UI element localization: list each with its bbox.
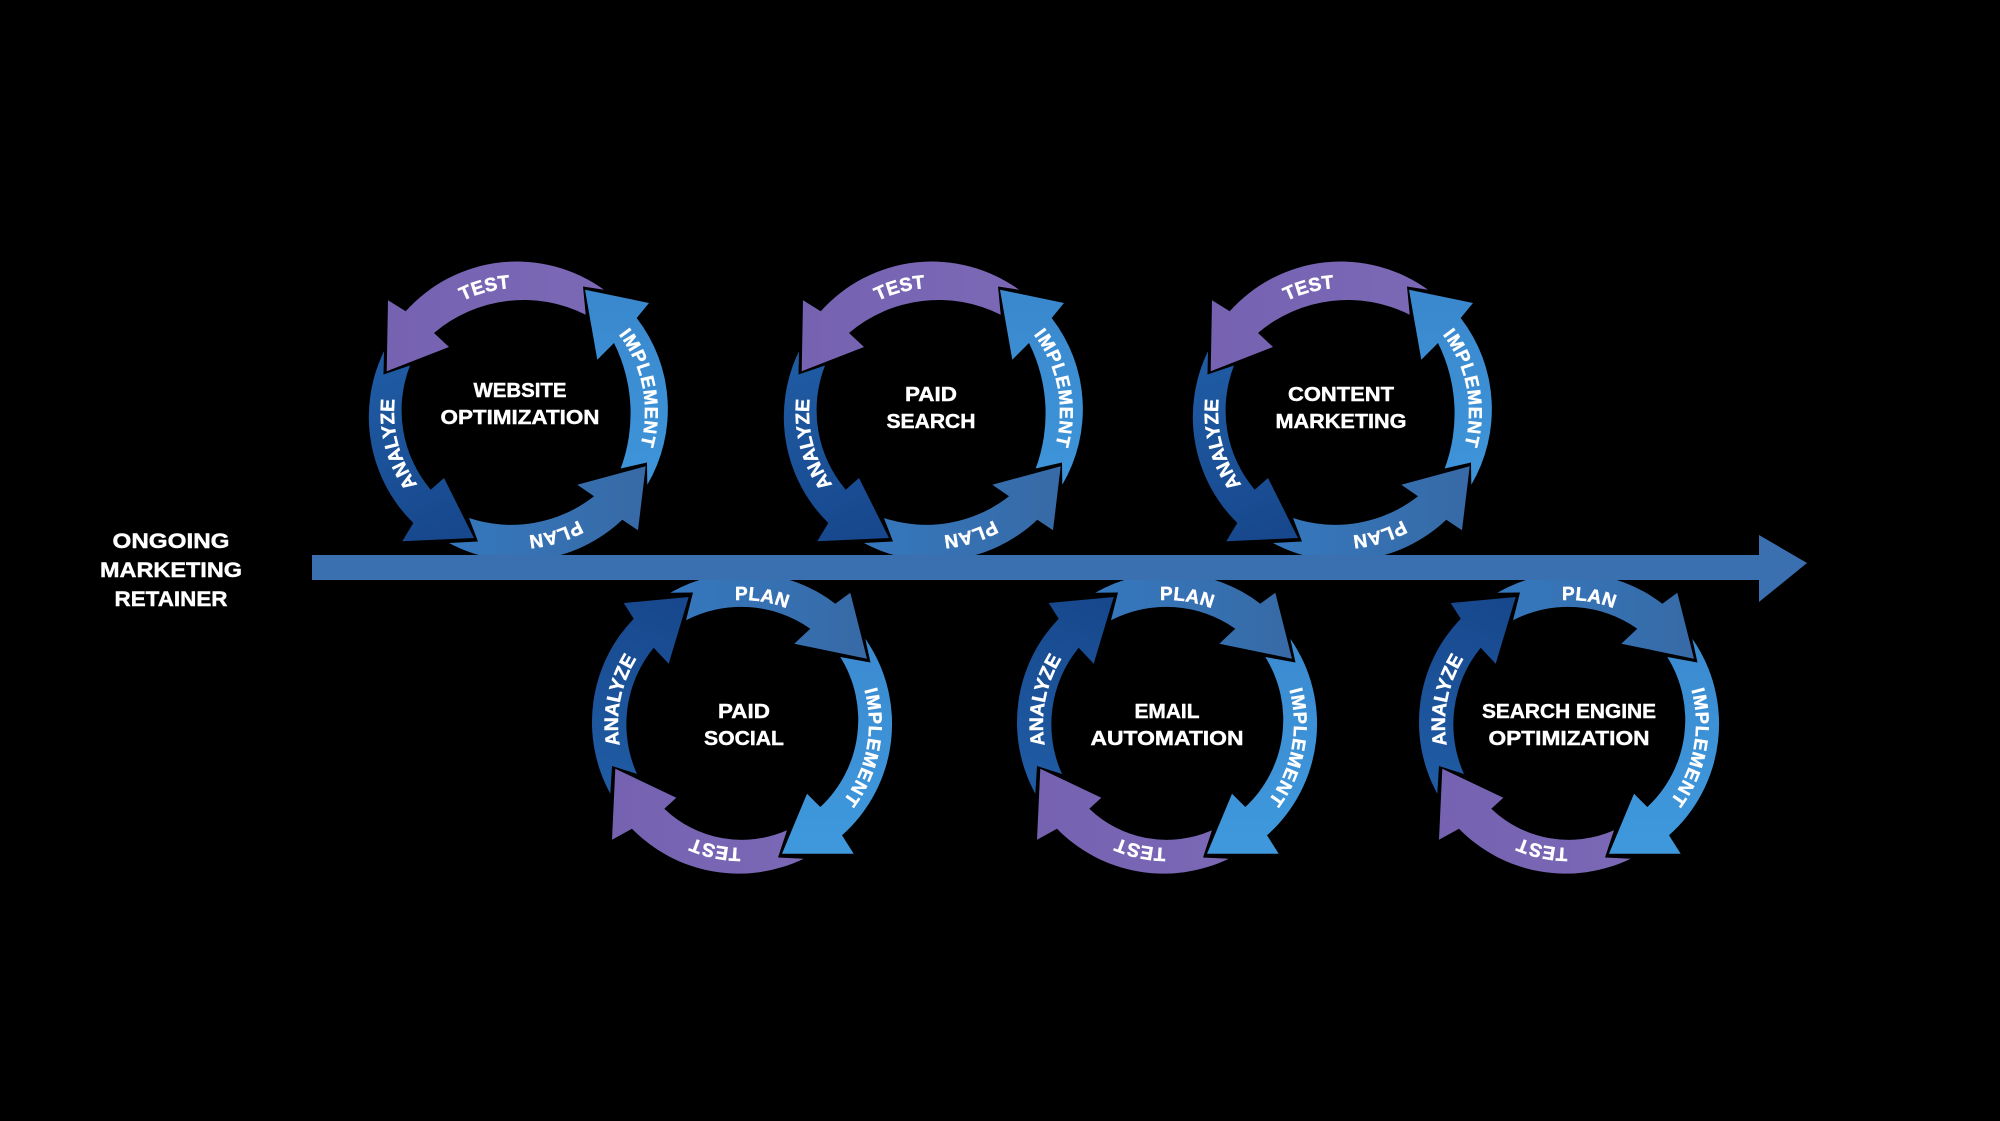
label: plan: PLAN — [944, 520, 998, 549]
title: content marketing — [1276, 383, 1406, 433]
title: paid social — [704, 700, 784, 750]
title: search engine optimization: SEARCH ENGINE — [1482, 700, 1656, 723]
title: paid social: SOCIAL — [704, 727, 784, 750]
title: website optimization: OPTIMIZATION — [440, 406, 600, 429]
arrow: implement — [1000, 290, 1083, 485]
label: test: TEST — [1113, 839, 1166, 862]
arrow: plan — [864, 466, 1061, 561]
heading: ongoing marketing retainer: MARKETING — [100, 558, 242, 582]
label: analyze: ANALYZE — [1029, 652, 1062, 745]
arrow: plan — [670, 573, 867, 659]
cycle: paid social — [592, 580, 892, 874]
title: search engine optimization: OPTIMIZATION — [1488, 727, 1650, 750]
arrow: test — [612, 769, 804, 874]
label: test: TEST — [1515, 839, 1568, 862]
arrow: test — [1439, 769, 1631, 874]
cycle: content marketing — [1192, 262, 1492, 555]
label: implement: IMPLEMENT — [846, 688, 882, 808]
arrow: implement — [1409, 290, 1492, 485]
label: test: TEST — [872, 274, 924, 300]
title: paid search: PAID — [905, 383, 957, 406]
label: test: TEST — [688, 839, 740, 862]
cycle: website optimization — [368, 262, 668, 555]
label: plan: PLAN — [736, 586, 790, 608]
label: test: TEST — [1281, 274, 1333, 300]
arrow: implement — [782, 639, 892, 854]
heading: ongoing marketing retainer — [100, 529, 242, 611]
arrow: timeline — [312, 535, 1807, 602]
arrow: analyze — [1017, 597, 1114, 794]
label: test: TEST — [457, 274, 509, 300]
title: email automation — [1090, 700, 1244, 750]
cycle: search engine optimization — [1419, 580, 1720, 874]
arrow: analyze — [1193, 351, 1298, 541]
arrow: analyze — [784, 351, 889, 541]
title: search engine optimization — [1482, 700, 1656, 750]
title: website optimization: WEBSITE — [474, 379, 566, 402]
title: paid search — [886, 383, 976, 433]
arrow: implement — [1609, 639, 1719, 854]
label: plan: PLAN — [1161, 586, 1215, 608]
cycle: paid search — [784, 262, 1083, 555]
label: plan: PLAN — [530, 520, 584, 549]
arrow: implement — [1207, 639, 1317, 854]
heading: ongoing marketing retainer: ONGOING — [112, 529, 230, 553]
title: email automation: EMAIL — [1134, 700, 1200, 723]
arrow: test — [1037, 769, 1229, 874]
label: analyze: ANALYZE — [1431, 652, 1464, 745]
label: implement: IMPLEMENT — [1443, 328, 1482, 448]
title: paid search: SEARCH — [886, 410, 976, 433]
heading: ongoing marketing retainer: RETAINER — [114, 587, 228, 611]
arrow: plan — [1095, 573, 1292, 659]
cycle: email automation — [1017, 580, 1318, 874]
label: implement: IMPLEMENT — [1034, 328, 1073, 448]
title: website optimization — [440, 379, 600, 429]
label: implement: IMPLEMENT — [619, 328, 658, 448]
arrow: test — [1211, 262, 1428, 371]
title: paid social: PAID — [718, 700, 770, 723]
arrow: test — [802, 262, 1019, 371]
arrow: analyze — [369, 351, 474, 541]
title: email automation: AUTOMATION — [1090, 727, 1244, 750]
arrow: analyze — [1419, 597, 1516, 794]
label: analyze: ANALYZE — [604, 652, 636, 745]
arrow: analyze — [592, 597, 689, 794]
arrow: plan — [1497, 573, 1694, 659]
label: analyze: ANALYZE — [1204, 400, 1242, 488]
title: content marketing: CONTENT — [1288, 383, 1395, 406]
arrow: implement — [585, 290, 668, 485]
label: plan: PLAN — [1354, 520, 1408, 549]
label: implement: IMPLEMENT — [1270, 688, 1307, 808]
arrow: plan — [1273, 466, 1470, 561]
label: analyze: ANALYZE — [795, 400, 832, 488]
label: plan: PLAN — [1563, 586, 1617, 608]
arrow: test — [387, 262, 604, 371]
title: content marketing: MARKETING — [1276, 410, 1406, 433]
label: implement: IMPLEMENT — [1672, 688, 1709, 808]
arrow: plan — [449, 466, 646, 561]
label: analyze: ANALYZE — [380, 400, 418, 488]
